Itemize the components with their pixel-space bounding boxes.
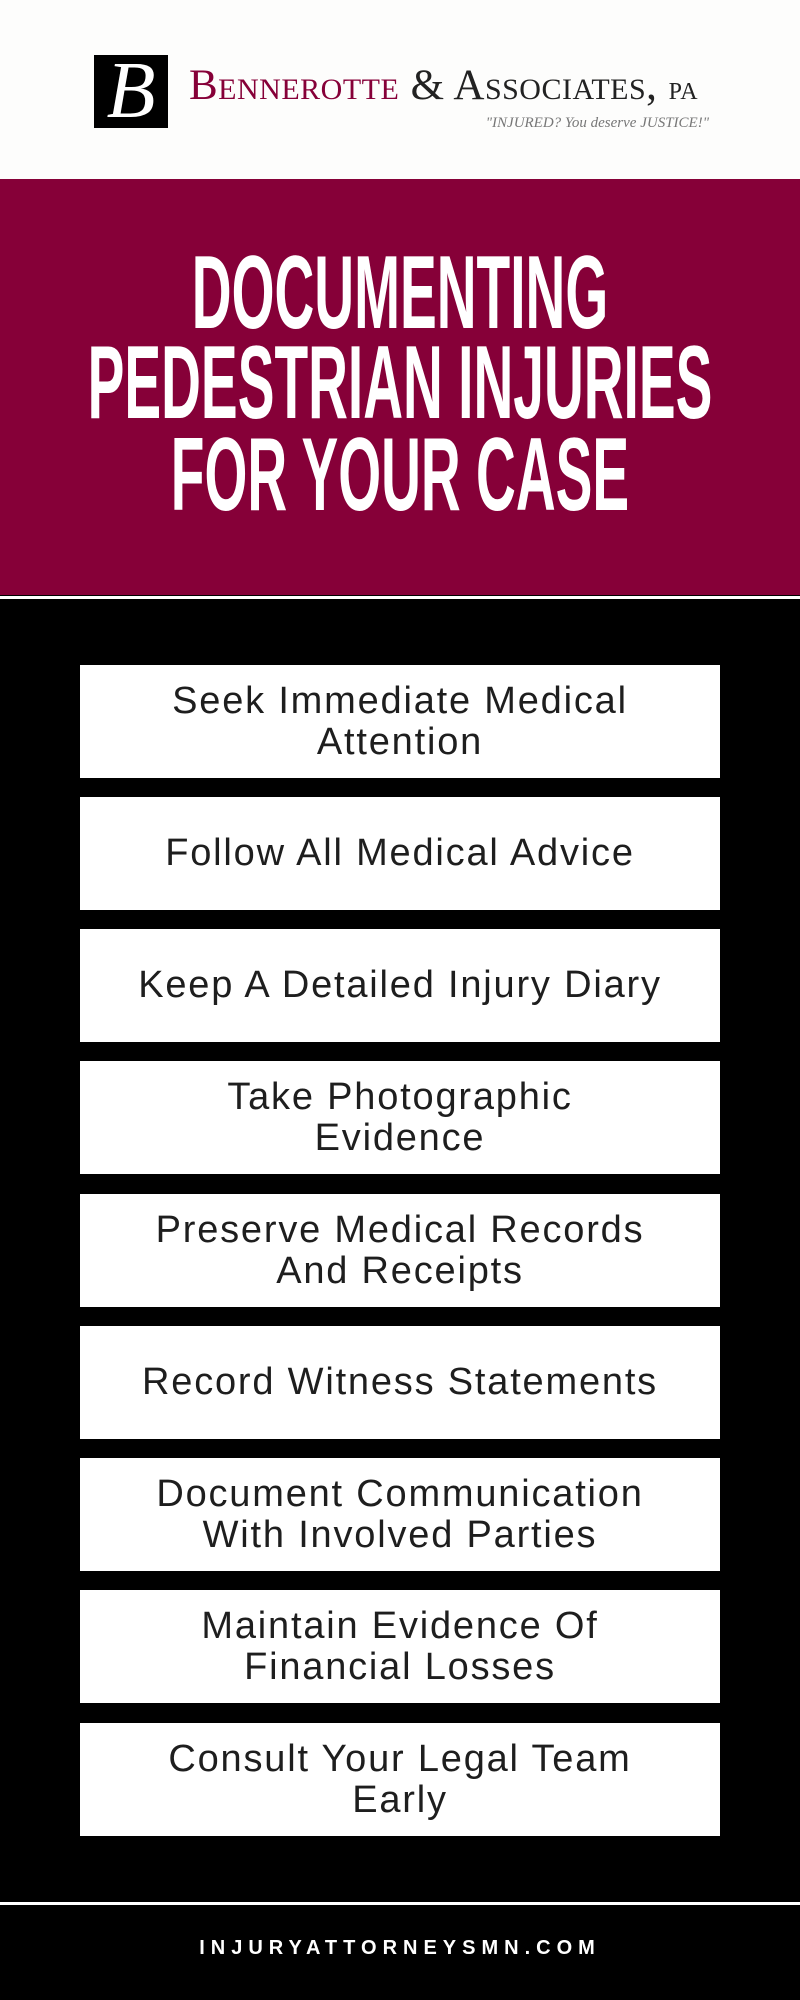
box: step 2: Follow All Medical Advice [165, 832, 635, 874]
box: step 9: Consult Your Legal Team [168, 1738, 632, 1780]
title banner [0, 179, 800, 595]
box: step 1 [80, 665, 720, 778]
icon: B monogram: B [107, 47, 155, 135]
title: PEDESTRIAN INJURIES [88, 325, 712, 441]
box: step 7: Document Communication [156, 1472, 644, 1514]
title: DOCUMENTING [192, 235, 608, 351]
box: step 1: Attention [317, 720, 483, 762]
title [88, 235, 712, 533]
header [0, 0, 800, 179]
box: step 7 [80, 1458, 720, 1571]
box: step 4: Take Photographic [227, 1076, 573, 1118]
box: step 9 [80, 1723, 720, 1836]
box: step 6 [80, 1326, 720, 1439]
logo [94, 47, 709, 135]
box: step 2 [80, 797, 720, 910]
footer url: INJURYATTORNEYSMN.COM [199, 1937, 601, 1959]
box: step 3 [80, 929, 720, 1042]
icon: B monogram [94, 55, 168, 128]
box: step 7: With Involved Parties [203, 1514, 597, 1556]
box: step 1: Seek Immediate Medical [172, 680, 628, 722]
box: step 9: Early [352, 1778, 448, 1820]
box: step 6: Record Witness Statements [142, 1361, 658, 1403]
box: step 4: Evidence [315, 1116, 485, 1158]
firm name: Bennerotte & Associates, pa [189, 62, 698, 109]
tagline: "INJURED? You deserve JUSTICE!" [486, 115, 709, 131]
title: FOR YOUR CASE [171, 417, 629, 533]
box: step 5 [80, 1194, 720, 1307]
box: step 4 [80, 1061, 720, 1174]
box: step 8: Financial Losses [244, 1646, 556, 1688]
box: step 5: Preserve Medical Records [156, 1208, 644, 1250]
box: step 8 [80, 1590, 720, 1703]
box: step 5: And Receipts [276, 1250, 524, 1292]
box: step 3: Keep A Detailed Injury Diary [138, 964, 662, 1006]
box: step 8: Maintain Evidence Of [201, 1604, 599, 1646]
